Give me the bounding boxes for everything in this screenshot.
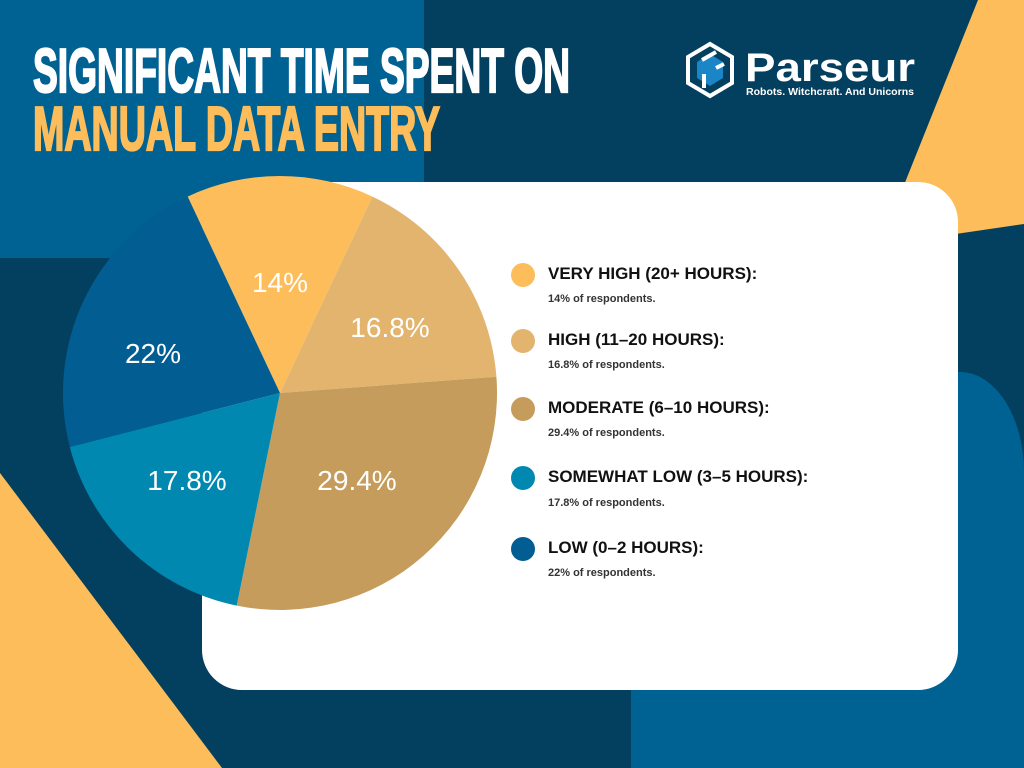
pie chart: 22%	[125, 338, 181, 369]
legend item: moderate	[511, 397, 770, 439]
pie chart: 16.8%	[350, 312, 430, 343]
legend: VERY HIGH (20+ HOURS):	[548, 264, 757, 283]
legend: 29.4% of respondents.	[548, 427, 665, 439]
legend: 22% of respondents.	[548, 567, 656, 579]
legend: 16.8% of respondents.	[548, 359, 665, 371]
logo: Parseur: Robots. Witchcraft. And Unicorns	[746, 86, 914, 98]
title	[33, 37, 570, 164]
legend: 17.8% of respondents.	[548, 497, 665, 509]
legend item: somewhat low	[511, 466, 808, 509]
legend item: high	[511, 329, 725, 371]
legend item: low	[511, 537, 704, 579]
legend: HIGH (11–20 HOURS):	[548, 330, 725, 349]
legend: SOMEWHAT LOW (3–5 HOURS):	[548, 467, 808, 486]
legend: LOW (0–2 HOURS):	[548, 538, 704, 557]
legend	[511, 263, 808, 579]
legend: 14% of respondents.	[548, 293, 656, 305]
logo: Parseur	[686, 42, 915, 98]
card	[202, 182, 958, 690]
pie chart: 14%	[252, 267, 308, 298]
logo: Parseur: Parseur	[745, 46, 915, 90]
pie chart: 17.8%	[147, 465, 227, 496]
legend: MODERATE (6–10 HOURS):	[548, 398, 770, 417]
pie chart: 29.4%	[317, 465, 397, 496]
legend item: very high	[511, 263, 757, 305]
